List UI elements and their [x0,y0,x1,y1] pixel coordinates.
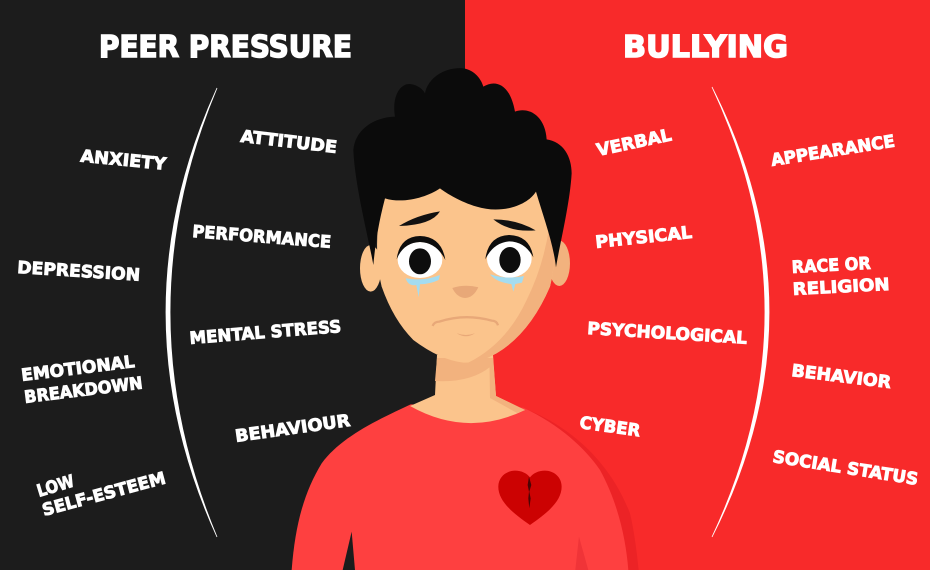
label: emotional breakdown: EMOTIONAL [20,352,136,386]
label: emotional breakdown [20,352,144,408]
panel: bullying background [465,0,930,570]
label: social status: SOCIAL STATUS [771,447,920,490]
label: psychological: PSYCHOLOGICAL [587,319,748,349]
label: behavior: BEHAVIOR [790,361,892,393]
arc: left divider [166,88,217,537]
icon: broken heart [498,471,562,525]
heading: peer pressure: PEER PRESSURE [99,30,352,65]
label: race or religion: RACE OR [791,254,871,278]
label: verbal: VERBAL [595,125,674,161]
heading: bullying: BULLYING [623,30,788,65]
label: attitude: ATTITUDE [239,127,338,158]
label: behaviour: BEHAVIOUR [234,411,352,447]
left eye [397,236,445,278]
nose [452,286,478,298]
ears [360,241,570,292]
face shadow [468,227,554,363]
label: physical: PHYSICAL [594,223,693,253]
labels: bullying inner column [578,125,748,441]
label: depression: DEPRESSION [17,258,141,286]
label: race or religion: RELIGION [792,275,890,300]
mouth [433,317,498,326]
right eye [485,235,533,278]
eyebrows [399,211,536,231]
hair [353,68,572,267]
labels: peer pressure inner column [189,127,352,447]
label: performance: PERFORMANCE [192,222,332,253]
tears [406,274,524,297]
head [353,68,572,363]
label: mental stress: MENTAL STRESS [189,317,342,349]
label: low self-esteem: LOW [35,471,77,502]
panel: peer pressure background [0,0,465,570]
arc: right divider [712,87,769,537]
chin crease [457,333,475,336]
neck [410,355,525,423]
labels: bullying outer column [770,132,920,490]
label: race or religion [791,254,890,300]
label: low self-esteem: SELF-ESTEEM [40,469,168,521]
labels: peer pressure outer column [17,147,168,521]
face [377,183,555,363]
figure: crying boy [292,68,639,570]
label: emotional breakdown: BREAKDOWN [23,374,144,408]
label: appearance: APPEARANCE [770,132,896,171]
label: anxiety: ANXIETY [80,147,168,175]
shirt [292,404,639,570]
label: cyber: CYBER [578,413,641,441]
